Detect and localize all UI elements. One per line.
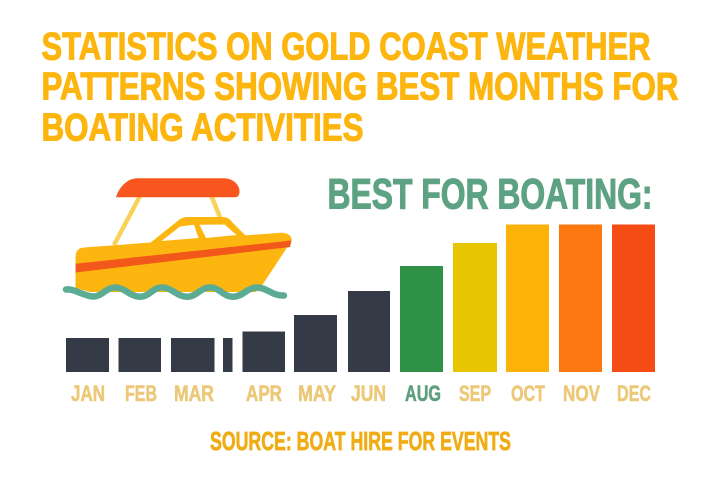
cabin windows xyxy=(162,224,236,241)
canopy struts xyxy=(114,196,221,245)
month labels: NOV xyxy=(563,381,600,406)
month labels: JAN xyxy=(71,381,105,406)
canopy xyxy=(116,178,240,197)
bar: nov xyxy=(559,224,602,372)
cabin xyxy=(150,217,246,243)
month labels: DEC xyxy=(617,381,651,406)
source line: SOURCE: BOAT HIRE FOR EVENTS xyxy=(210,428,511,456)
month labels: MAR xyxy=(174,381,214,406)
bar: dec xyxy=(612,224,655,372)
bar: sep xyxy=(453,243,497,372)
bar: aug xyxy=(400,266,443,372)
month labels: MAY xyxy=(298,381,336,406)
month labels: JUN xyxy=(351,381,386,406)
hull stripe xyxy=(76,240,292,272)
month labels: AUG xyxy=(405,381,441,406)
bar chart xyxy=(66,224,655,372)
waves xyxy=(66,288,284,297)
month labels: OCT xyxy=(511,381,545,406)
bar: oct xyxy=(506,224,549,372)
month labels: APR xyxy=(246,381,282,406)
hull xyxy=(76,233,292,292)
month labels xyxy=(71,381,651,406)
icon: speedboat on waves xyxy=(66,178,292,297)
title xyxy=(42,26,679,150)
month labels: SEP xyxy=(459,381,491,406)
month labels: FEB xyxy=(125,381,157,406)
bars: dark months xyxy=(66,291,390,372)
title: BOATING ACTIVITIES xyxy=(42,106,364,150)
